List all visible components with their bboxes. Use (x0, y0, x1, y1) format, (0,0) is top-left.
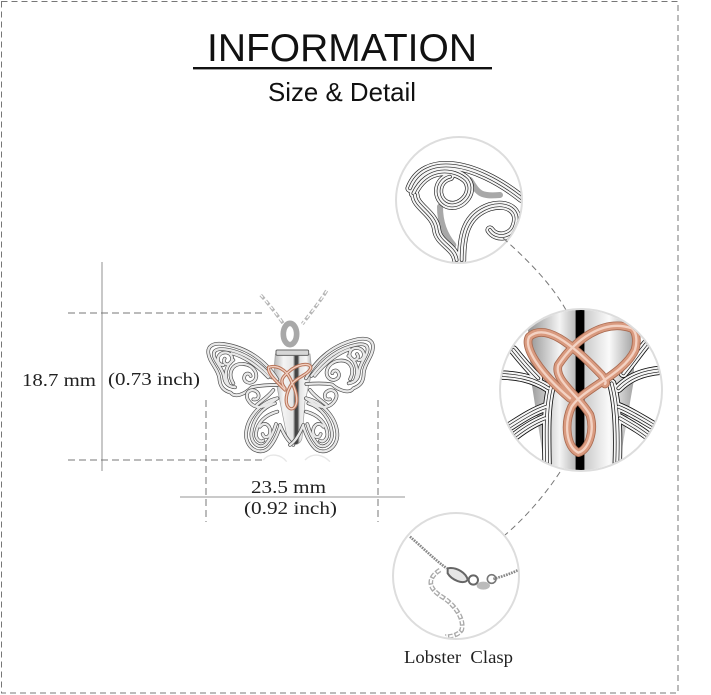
label: width in mm: 23.5 mm (251, 477, 326, 497)
dashed connector: wing to knot (503, 238, 566, 310)
urn cylinder (274, 354, 312, 445)
butterfly pendant (208, 291, 376, 462)
label: Lobster Clasp: Lobster Clasp (404, 647, 513, 667)
label: height in inches: (0.73 inch) (108, 369, 200, 390)
detail circle: wing (396, 137, 522, 263)
long chain (410, 537, 447, 568)
detail circle: lobster clasp (393, 513, 519, 639)
label: width in inches: (0.92 inch) (244, 498, 337, 519)
subtitle: Size & Detail: Size & Detail (268, 77, 416, 107)
urn body (527, 310, 637, 480)
label: height in mm: 18.7 mm (22, 370, 96, 390)
reflection (263, 455, 330, 462)
extender chain (431, 570, 462, 637)
necklace chain (261, 291, 327, 325)
right wings (290, 338, 376, 451)
clasp rings (469, 575, 478, 585)
dashed connector: knot to clasp (505, 472, 560, 535)
right chain (493, 570, 518, 579)
detail circle: rose gold knot (497, 309, 663, 480)
title underline (193, 67, 492, 69)
height dimension guide (68, 262, 262, 471)
width dimension guide (180, 400, 405, 522)
rose knot (528, 326, 636, 453)
silver wires (502, 340, 660, 464)
rose gold knot (269, 364, 311, 409)
title: INFORMATION: INFORMATION (207, 27, 477, 70)
left wings (208, 344, 293, 451)
urn cap (276, 350, 309, 355)
clasp (448, 568, 468, 582)
urn bail (283, 323, 297, 345)
